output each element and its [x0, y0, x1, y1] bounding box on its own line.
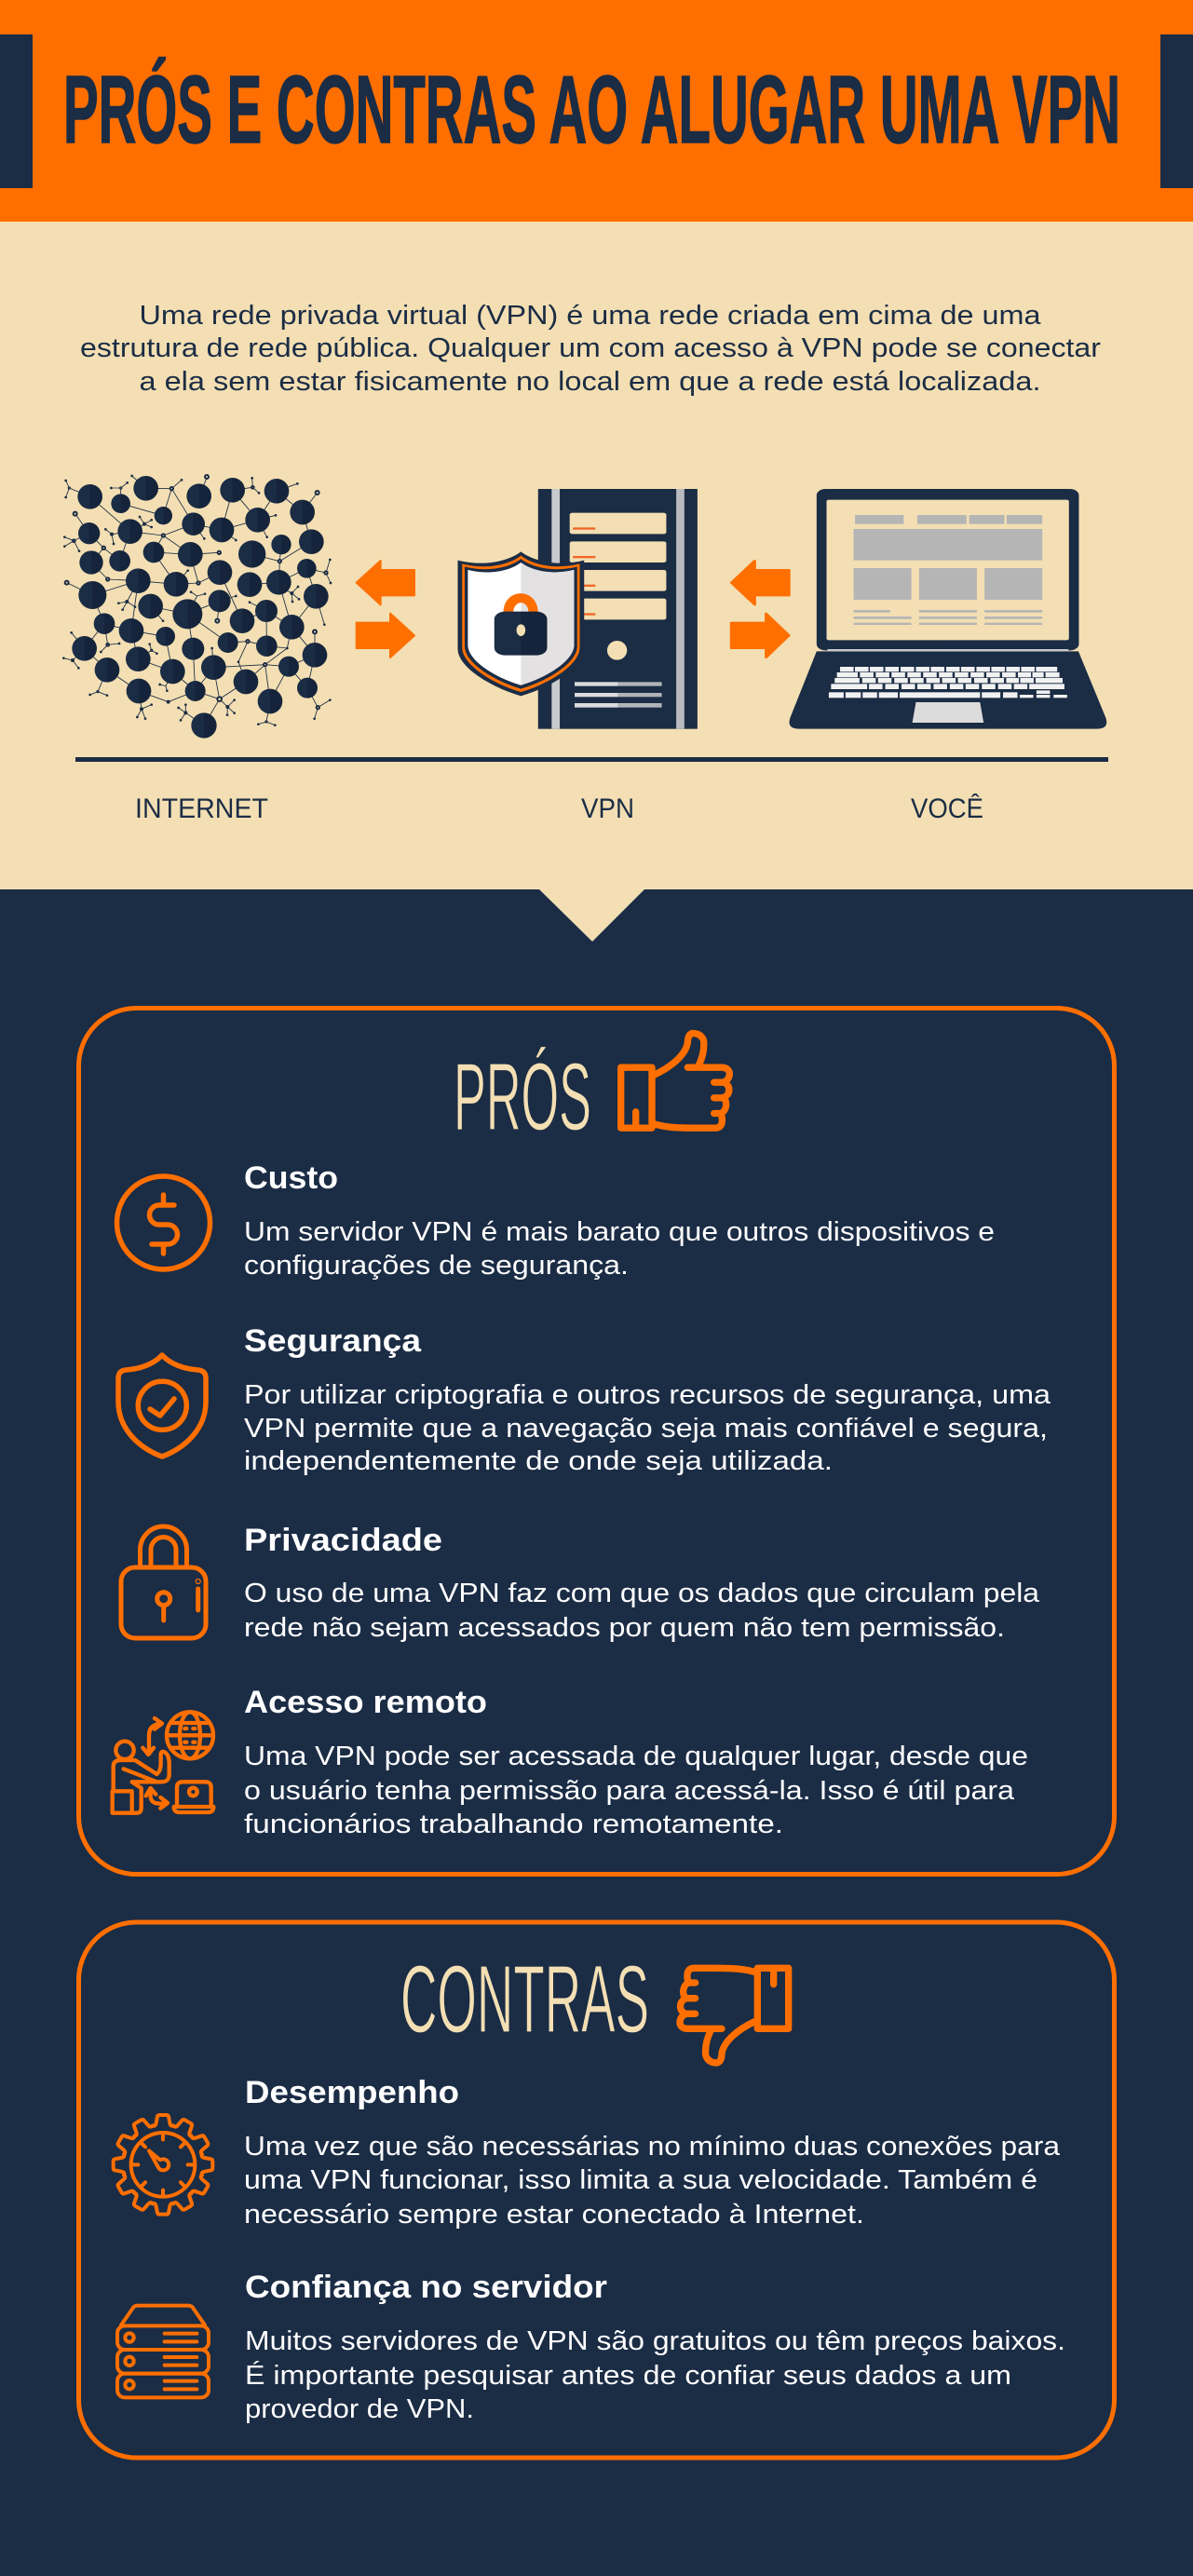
text: desempenho: uma VPN funcionar, isso limita a sua velocidade. Também é — [244, 2165, 1037, 2195]
text: custo: Um servidor VPN é mais barato que outros dispositivos e — [244, 1217, 995, 1247]
text: segurança: independentemente de onde seja utilizada. — [244, 1446, 833, 1476]
item: desempenho — [114, 2075, 1061, 2230]
network illustration: internet — [63, 475, 331, 739]
text: custo — [244, 1217, 995, 1281]
icon: thumbs down — [680, 1968, 789, 2063]
text: desempenho: Uma vez que são necessárias no mínimo duas conexões para — [244, 2132, 1061, 2162]
icon: padlock — [121, 1526, 206, 1638]
icon: remote worker with globe and laptop — [113, 1712, 213, 1813]
text: privacidade — [244, 1579, 1040, 1643]
header banner — [0, 0, 1193, 222]
heading: contras: CONTRAS — [400, 1946, 649, 2053]
icon: server stack — [117, 2306, 209, 2397]
item: confiança no servidor — [117, 2270, 1065, 2424]
text: desempenho: necessário sempre estar conectado à Internet. — [244, 2200, 864, 2230]
item: custo — [117, 1160, 995, 1281]
text: acesso remoto: funcionários trabalhando remotamente. — [244, 1810, 783, 1839]
heading: privacidade: Privacidade — [244, 1523, 442, 1558]
icon: shield with check — [118, 1355, 206, 1457]
panel: prós — [78, 1008, 1114, 1874]
text: confiança no servidor — [245, 2326, 1065, 2424]
text: segurança: Por utilizar criptografia e outros recursos de segurança, uma — [244, 1380, 1051, 1410]
heading: desempenho: Desempenho — [245, 2075, 459, 2110]
heading: segurança: Segurança — [244, 1323, 422, 1359]
panel: contras — [78, 1922, 1114, 2458]
text: acesso remoto — [244, 1742, 1028, 1839]
item: acesso remoto — [113, 1685, 1028, 1839]
intro text — [80, 301, 1101, 397]
text: segurança: VPN permite que a navegação seja mais confiável e segura, — [244, 1414, 1048, 1444]
icon: gear with speedometer — [114, 2115, 212, 2215]
intro text: a ela sem estar fisicamente no local em que a rede está localizada. — [140, 367, 1041, 397]
text: custo: configurações de segurança. — [244, 1251, 629, 1281]
illustration: laptop — [790, 489, 1106, 729]
label: você: VOCÊ — [911, 793, 983, 824]
text: confiança no servidor: Muitos servidores de VPN são gratuitos ou têm preços baixos. — [245, 2326, 1065, 2356]
item: privacidade — [121, 1523, 1040, 1643]
text: segurança — [244, 1380, 1051, 1476]
heading: acesso remoto: Acesso remoto — [244, 1685, 487, 1720]
text: acesso remoto: Uma VPN pode ser acessada de qualquer lugar, desde que — [244, 1742, 1028, 1771]
label: internet: INTERNET — [135, 793, 268, 824]
heading: confiança no servidor: Confiança no servidor — [245, 2270, 607, 2305]
text: confiança no servidor: provedor de VPN. — [245, 2394, 474, 2424]
text: desempenho — [244, 2132, 1061, 2230]
intro text: Uma rede privada virtual (VPN) é uma rede criada em cima de uma — [140, 301, 1041, 331]
text: privacidade: rede não sejam acessados por quem não tem permissão. — [244, 1613, 1005, 1643]
icon: dollar coin — [117, 1176, 210, 1269]
heading: prós: PRÓS — [454, 1043, 591, 1150]
divider line — [75, 757, 1108, 762]
text: acesso remoto: o usuário tenha permissão para acessá-la. Isso é útil para — [244, 1776, 1015, 1806]
icon: thumbs up — [621, 1034, 729, 1128]
arrows: internet to VPN — [357, 561, 414, 658]
arrows: VPN to user — [731, 561, 789, 658]
intro text: estrutura de rede pública. Qualquer um com acesso à VPN pode se conectar — [80, 333, 1101, 363]
heading: custo: Custo — [244, 1160, 338, 1196]
illustration: VPN server with shield — [458, 489, 698, 729]
text: confiança no servidor: É importante pesquisar antes de confiar seus dados a um — [245, 2360, 1011, 2391]
item: segurança — [118, 1323, 1051, 1476]
text: privacidade: O uso de uma VPN faz com que os dados que circulam pela — [244, 1579, 1040, 1608]
intro panel: cream background — [0, 222, 1193, 942]
label: vpn: VPN — [581, 793, 634, 824]
